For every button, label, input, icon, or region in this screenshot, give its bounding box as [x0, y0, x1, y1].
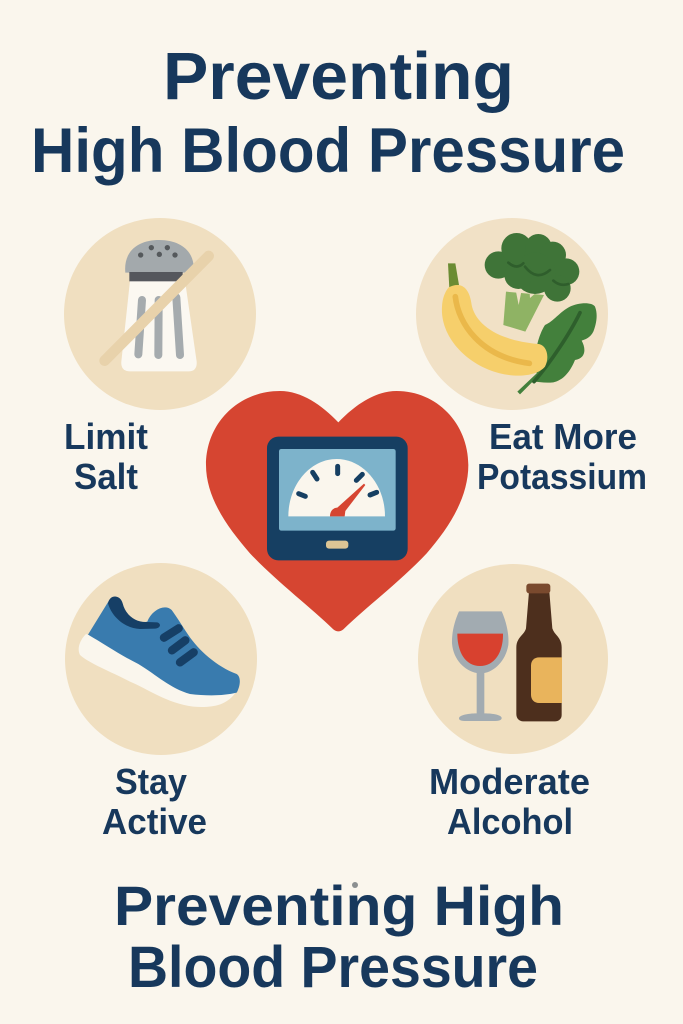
icon background: eat more potassium: [416, 218, 608, 410]
icon background: limit salt: [64, 218, 256, 410]
title: [31, 39, 625, 186]
label: eat more potassium: [477, 416, 647, 497]
icon: banana, broccoli and leafy greens: [442, 233, 597, 394]
icon background: stay active: [65, 563, 257, 755]
icon: running shoe: [79, 596, 240, 707]
panel: moderate alcohol: [418, 564, 608, 842]
icon: blood pressure monitor: [267, 437, 408, 560]
label: eat more potassium: Eat More: [489, 416, 637, 457]
label: moderate alcohol: Alcohol: [447, 801, 573, 842]
panel: eat more potassium: [416, 218, 647, 497]
closing title: Preventing High: [114, 874, 564, 937]
closing title: [114, 874, 564, 1000]
closing title: Blood Pressure: [128, 935, 538, 1000]
label: stay active: Active: [102, 801, 207, 842]
label: stay active: [102, 761, 207, 842]
label: moderate alcohol: [429, 761, 590, 842]
label: moderate alcohol: Moderate: [429, 761, 590, 802]
label: eat more potassium: Potassium: [477, 456, 647, 497]
icon: wine glass and beer bottle: [452, 584, 562, 721]
label: stay active: Stay: [115, 761, 187, 802]
label: limit salt: [64, 416, 148, 497]
icon: crossed-out salt shaker: [105, 240, 209, 371]
icon: heart: [206, 391, 468, 631]
label: limit salt: Salt: [74, 456, 138, 497]
title: High Blood Pressure: [31, 116, 625, 186]
icon background: moderate alcohol: [418, 564, 608, 754]
panel: stay active: [65, 563, 257, 842]
label: limit salt: Limit: [64, 416, 148, 457]
central heart with blood pressure monitor: [206, 391, 468, 631]
panel: limit salt: [64, 218, 256, 497]
title: Preventing: [163, 39, 514, 114]
